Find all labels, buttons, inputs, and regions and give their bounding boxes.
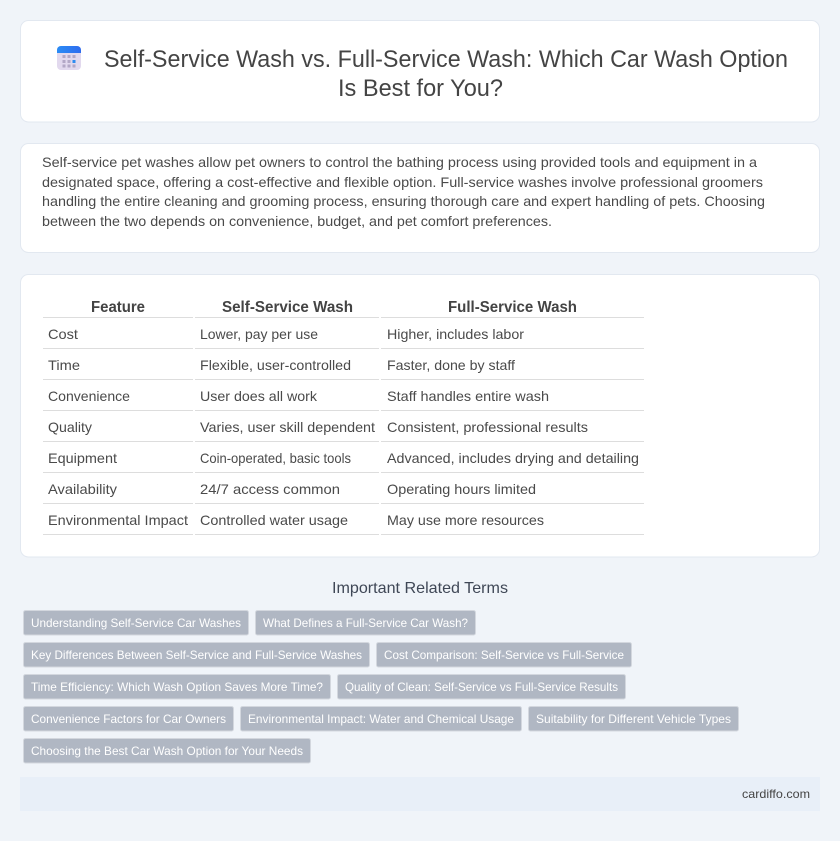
tag: Suitability for Different Vehicle Types bbox=[536, 712, 731, 726]
tag bbox=[240, 706, 522, 731]
table row: cost: Cost bbox=[48, 326, 78, 342]
table row: environmental impact: Environmental Impact bbox=[48, 512, 188, 528]
title: Self-Service Wash vs. Full-Service Wash: Which Car Wash Option bbox=[104, 46, 788, 73]
table row: availability: Availability bbox=[48, 481, 117, 497]
table row: equipment: Advanced, includes drying and detailing bbox=[387, 450, 639, 466]
table row: convenience bbox=[48, 388, 549, 404]
table row: environmental impact bbox=[48, 512, 544, 528]
tag bbox=[24, 610, 248, 635]
table row: time: Faster, done by staff bbox=[387, 357, 515, 373]
table header row bbox=[91, 299, 577, 316]
table row: environmental impact: May use more resources bbox=[387, 512, 544, 528]
heading: related terms: Important Related Terms bbox=[332, 580, 508, 597]
table row: equipment bbox=[48, 450, 639, 466]
table row: cost bbox=[48, 326, 524, 342]
table row: equipment: Coin-operated, basic tools bbox=[200, 450, 351, 466]
text block: summary paragraph: Self-service pet washes allow pet owners to control the bathing process using provided tools and equipment in a bbox=[42, 154, 757, 170]
tag: Convenience Factors for Car Owners bbox=[31, 712, 226, 726]
tag list: related terms bbox=[24, 610, 738, 763]
table row: availability: 24/7 access common bbox=[200, 481, 340, 497]
tag bbox=[256, 610, 476, 635]
table row: cost: Lower, pay per use bbox=[200, 326, 318, 342]
tag: Understanding Self-Service Car Washes bbox=[31, 616, 241, 630]
tag: Choosing the Best Car Wash Option for Your Needs bbox=[31, 744, 303, 758]
table row: equipment: Equipment bbox=[48, 450, 117, 466]
text block: summary paragraph: handling the entire cleaning and grooming process, ensuring thorough care and expert handling of pets. Choosing bbox=[42, 193, 765, 209]
table row: quality bbox=[48, 419, 588, 435]
icon: calendar bbox=[57, 46, 81, 70]
panel: title header bbox=[20, 20, 820, 122]
table row: environmental impact: Controlled water usage bbox=[200, 512, 348, 528]
table header row: Full-Service Wash bbox=[448, 299, 577, 316]
tag bbox=[24, 706, 234, 731]
table header row: Feature bbox=[91, 299, 145, 316]
tag bbox=[24, 642, 370, 667]
table row: availability: Operating hours limited bbox=[387, 481, 536, 497]
tag: Cost Comparison: Self-Service vs Full-Service bbox=[384, 648, 624, 662]
table row: availability bbox=[48, 481, 536, 497]
table row: quality: Quality bbox=[48, 419, 92, 435]
table row: convenience: User does all work bbox=[200, 388, 318, 404]
text block: summary paragraph: designated space, offering a cost-effective and flexible option. Full-service washes involve professional groomers bbox=[42, 174, 763, 190]
tag bbox=[376, 642, 632, 667]
tag bbox=[24, 738, 310, 763]
tag bbox=[528, 706, 738, 731]
tag: Time Efficiency: Which Wash Option Saves More Time? bbox=[31, 680, 323, 694]
title: Is Best for You? bbox=[338, 75, 503, 102]
tag bbox=[338, 674, 626, 699]
table header row: Self-Service Wash bbox=[222, 299, 353, 316]
table row: time bbox=[48, 357, 515, 373]
footer bbox=[20, 777, 820, 811]
table row: convenience: Staff handles entire wash bbox=[387, 388, 549, 404]
text block: summary paragraph: between the two depends on convenience, budget, and pet comfort preferences. bbox=[42, 213, 552, 229]
tag: Environmental Impact: Water and Chemical Usage bbox=[248, 712, 514, 726]
table row: time: Flexible, user-controlled bbox=[200, 357, 351, 373]
table row: time: Time bbox=[48, 357, 80, 373]
table row: quality: Varies, user skill dependent bbox=[200, 419, 375, 435]
tag bbox=[24, 674, 330, 699]
tag: Key Differences Between Self-Service and Full-Service Washes bbox=[31, 648, 362, 662]
tag: What Defines a Full-Service Car Wash? bbox=[263, 616, 468, 630]
tag: Quality of Clean: Self-Service vs Full-Service Results bbox=[345, 680, 618, 694]
table row: quality: Consistent, professional results bbox=[387, 419, 588, 435]
table row: convenience: Convenience bbox=[48, 388, 130, 404]
footer brand: cardiffo.com bbox=[742, 787, 810, 801]
table row: cost: Higher, includes labor bbox=[387, 326, 524, 342]
panel: introduction text bbox=[20, 144, 820, 252]
panel: comparison table bbox=[20, 274, 820, 557]
